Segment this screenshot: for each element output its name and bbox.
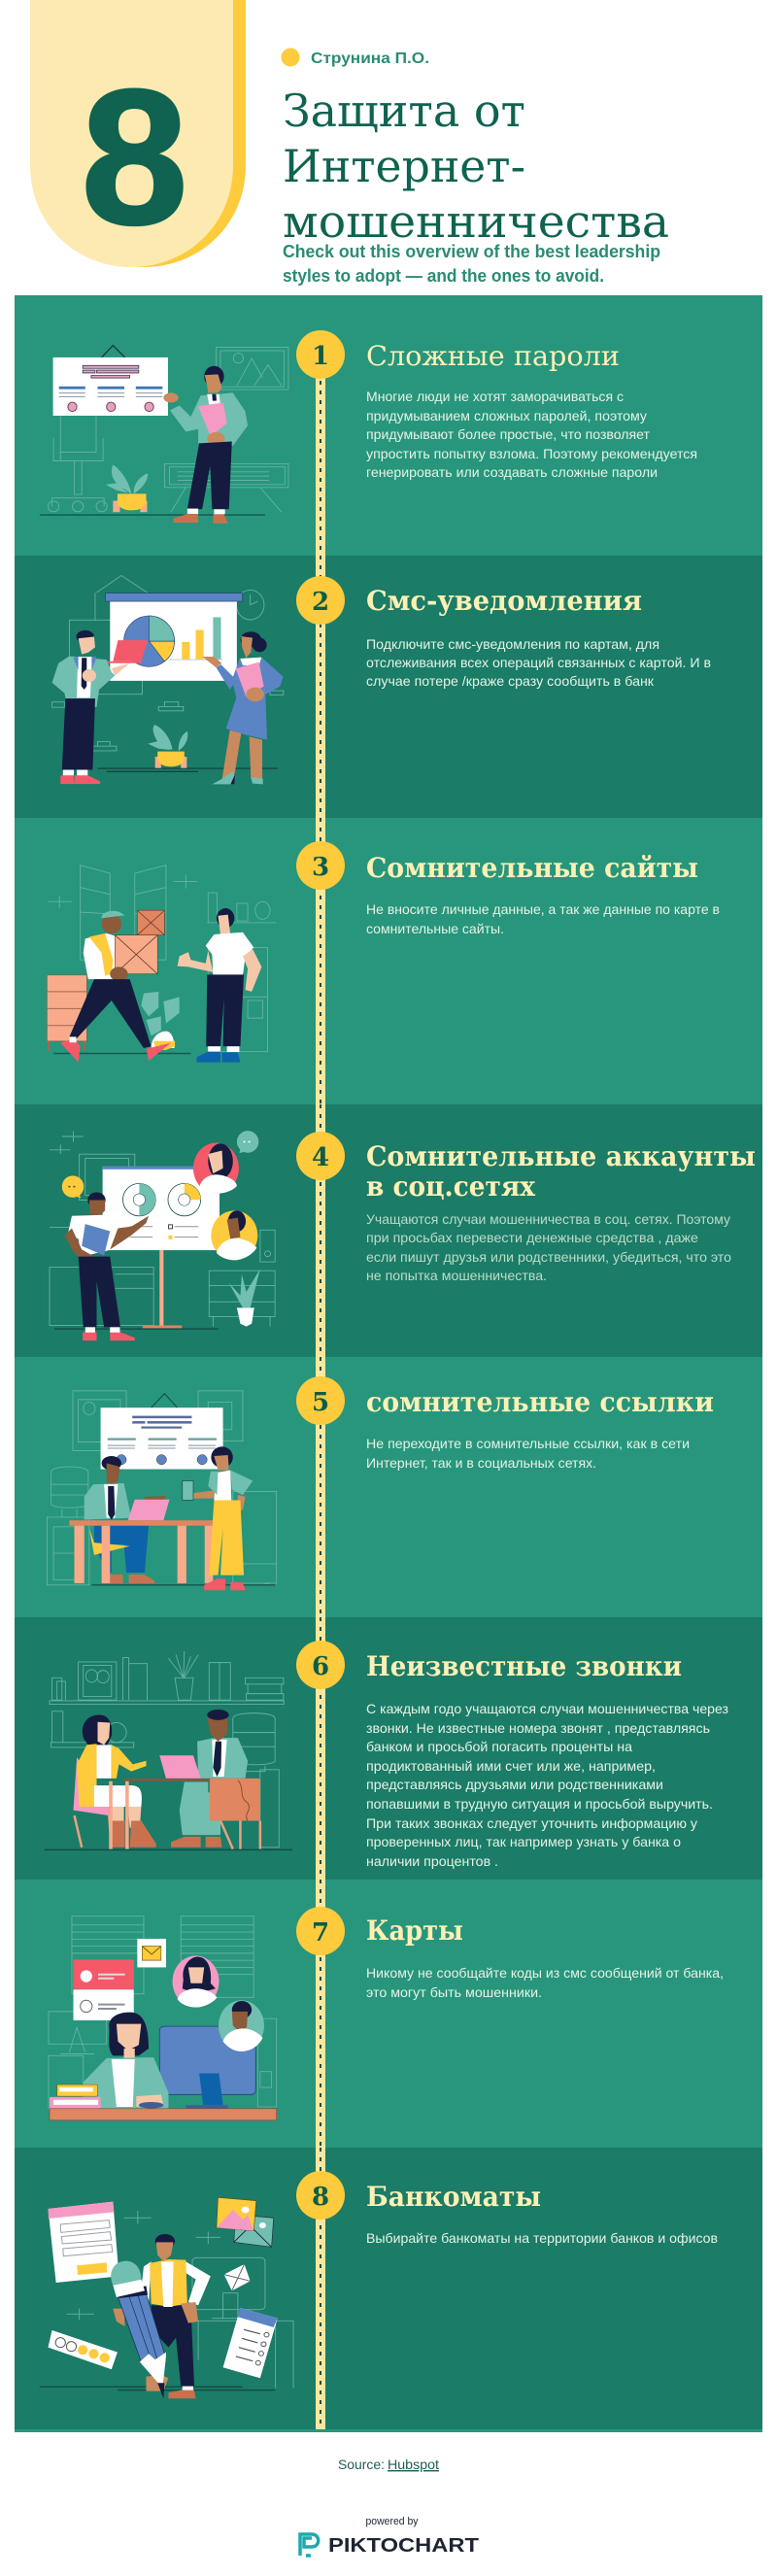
source line bbox=[338, 2457, 439, 2472]
author line: Струнина П.О. bbox=[311, 51, 429, 67]
body text 6: проверенных лиц, так например узнать у банка о bbox=[366, 1834, 681, 1849]
body text 3: Не вносите личные данные, а так же данные по карте в bbox=[366, 901, 720, 917]
body text 3: сомнительные сайты. bbox=[366, 921, 504, 936]
panel: step 5 suspicious links bbox=[15, 1357, 762, 1617]
body text 5: Интернет, так и в социальных сетях. bbox=[366, 1455, 596, 1471]
body text 7 bbox=[366, 1965, 724, 2000]
panel: step 8 ATMs bbox=[15, 2148, 762, 2432]
source line: Hubspot bbox=[388, 2457, 439, 2472]
panel: step 7 cards bbox=[15, 1880, 762, 2148]
body text 4: если пишут друзья или родственники, убедиться, что это bbox=[366, 1249, 731, 1265]
badge 6 bbox=[296, 1641, 345, 1689]
header banner with number 8: 8 bbox=[81, 50, 188, 264]
body text 8: Выбирайте банкоматы на территории банков и офисов bbox=[366, 2230, 718, 2246]
body text 1 bbox=[366, 389, 697, 480]
illustration: office desk meeting bbox=[47, 1391, 277, 1590]
header banner with number 8 bbox=[30, 0, 246, 267]
woman presenter bbox=[202, 631, 284, 784]
body text 7: это могут быть мошенники. bbox=[366, 1984, 542, 2000]
heading 4: Сомнительные аккаунты bbox=[366, 1140, 756, 1172]
badge 1: 1 bbox=[312, 342, 329, 371]
body text 3 bbox=[366, 901, 720, 936]
body text 1: придумывают более простые, что позволяет bbox=[366, 426, 651, 442]
icon: piktochart mark bbox=[300, 2534, 319, 2556]
body text 4: при просьбах перевести денежные средства , даже bbox=[366, 1230, 698, 1245]
badge 1 bbox=[296, 330, 345, 379]
heading 1: Сложные пароли bbox=[366, 340, 620, 372]
body text 5 bbox=[366, 1436, 690, 1471]
illustration: two people with chart bbox=[52, 576, 284, 784]
illustration: courier with boxes bbox=[47, 865, 276, 1063]
author line bbox=[282, 49, 429, 67]
body text 4 bbox=[366, 1211, 731, 1283]
heading 6: Неизвестные звонки bbox=[366, 1650, 682, 1682]
badge 2 bbox=[296, 576, 345, 625]
powered by Piktochart logo: powered by bbox=[365, 2516, 419, 2527]
panel: step 4 suspicious social accounts bbox=[15, 1104, 762, 1357]
body text 6: С каждым годо учащаются случаи мошенничества через bbox=[366, 1701, 728, 1716]
body text 6 bbox=[366, 1701, 728, 1869]
badge 4: 4 bbox=[312, 1143, 329, 1172]
body text 6: наличии процентов . bbox=[366, 1853, 498, 1869]
heading 5: сомнительные ссылки bbox=[366, 1386, 714, 1418]
body text 2: Подключите смс-уведомления по картам, для bbox=[366, 636, 659, 652]
title: Интернет- bbox=[283, 140, 525, 192]
body text 2: отслеживания всех операций связанных с картой. И в bbox=[366, 655, 711, 670]
badge 3: 3 bbox=[312, 853, 329, 882]
badge 8: 8 bbox=[312, 2183, 329, 2212]
badge 7: 7 bbox=[312, 1918, 329, 1948]
heading 7: Карты bbox=[366, 1915, 463, 1947]
body text 4: Учащаются случаи мошенничества в соц. сетях. Поэтому bbox=[366, 1211, 730, 1227]
body text 6: При таких звонках следует уточнить информацию у bbox=[366, 1815, 697, 1831]
body text 5: Не переходите в сомнительные ссылки, как в сети bbox=[366, 1436, 690, 1451]
title bbox=[283, 85, 669, 248]
heading 2: Смс-уведомления bbox=[366, 585, 642, 617]
body text 2: случае потере /краже сразу сообщить в банк bbox=[366, 673, 655, 689]
title: Защита от bbox=[283, 85, 525, 137]
badge 4 bbox=[296, 1132, 345, 1180]
body text 7: Никому не сообщайте коды из смс сообщений от банка, bbox=[366, 1965, 724, 1981]
powered by Piktochart logo bbox=[300, 2516, 479, 2557]
panel: step 2 sms notifications bbox=[15, 556, 762, 818]
badge 8 bbox=[296, 2171, 345, 2220]
panel: step 1 complex passwords bbox=[15, 295, 762, 556]
subtitle: Check out this overview of the best leadership bbox=[283, 242, 660, 261]
body text 6: попавшими в трудную ситуация и просьбой выручить. bbox=[366, 1796, 713, 1812]
heading 4: в соц.сетях bbox=[366, 1170, 535, 1203]
source line: Source: bbox=[338, 2457, 385, 2472]
illustration: woman at computer with avatars bbox=[49, 1916, 277, 2120]
subtitle bbox=[283, 242, 660, 286]
badge 5 bbox=[296, 1376, 345, 1425]
panel: step 6 unknown calls bbox=[15, 1617, 762, 1880]
title: мошенничества bbox=[283, 195, 669, 248]
heading 8: Банкоматы bbox=[366, 2181, 541, 2213]
body text 6: банком и просьбой погасить проценты на bbox=[366, 1739, 632, 1754]
badge 6: 6 bbox=[312, 1652, 329, 1681]
body text 6: представляясь друзьями или родственниками bbox=[366, 1777, 663, 1792]
body text 6: звонки. Не известные номера звонят , представляясь bbox=[366, 1720, 710, 1736]
body text 1: Многие люди не хотят заморачиваться с bbox=[366, 389, 624, 404]
panel: step 3 suspicious sites bbox=[15, 818, 762, 1104]
illustration: presenter at poster bbox=[40, 346, 288, 524]
heading 3: Сомнительные сайты bbox=[366, 852, 698, 884]
body text 2 bbox=[366, 636, 711, 689]
body text 1: генерировать или создавать сложные пароли bbox=[366, 464, 658, 480]
badge 7 bbox=[296, 1907, 345, 1955]
badge 2: 2 bbox=[312, 588, 329, 617]
badge 3 bbox=[296, 841, 345, 890]
illustration: man with charts and avatars bbox=[50, 1131, 275, 1340]
body text 6: продиктованный ими счет или же, например, bbox=[366, 1758, 656, 1774]
illustration: man with giant pencil bbox=[40, 2197, 293, 2398]
body text 1: придумыванием сложных паролей, поэтому bbox=[366, 408, 647, 424]
body text 1: упростить попытку взлома. Поэтому рекомендуется bbox=[366, 446, 697, 461]
powered by Piktochart logo: PIKTOCHART bbox=[328, 2535, 479, 2557]
heading 4 bbox=[366, 1140, 756, 1203]
badge 5: 5 bbox=[312, 1388, 329, 1417]
subtitle: styles to adopt — and the ones to avoid. bbox=[283, 266, 604, 286]
illustration: two people at a table bbox=[45, 1651, 292, 1849]
body text 4: не попытка мошенничества. bbox=[366, 1268, 547, 1283]
